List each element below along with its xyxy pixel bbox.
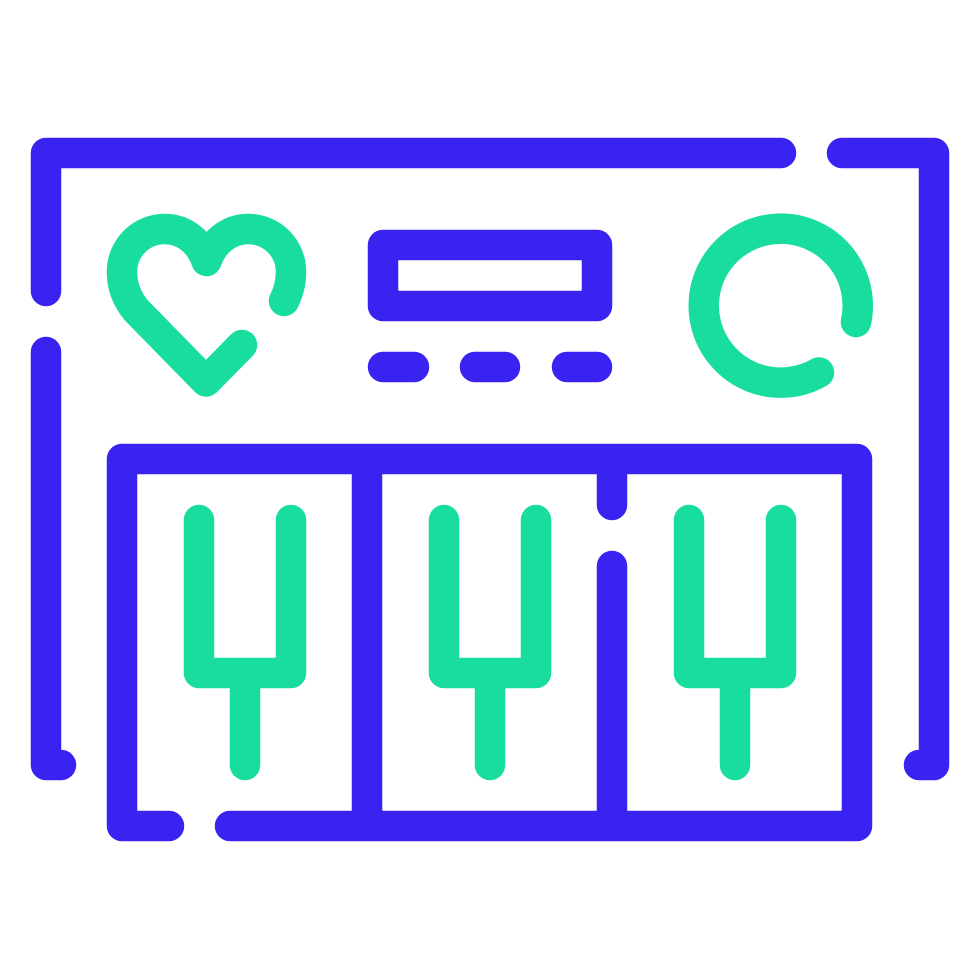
keyboard frame: [122, 459, 857, 826]
outer casing outline: [46, 153, 934, 765]
three small buttons: [383, 352, 597, 382]
slider 3: [689, 520, 781, 765]
slider 2: [444, 520, 536, 765]
icon: round dial: [704, 229, 858, 383]
display screen: [383, 245, 597, 306]
slider 1: [199, 520, 291, 765]
icon: heart: [122, 229, 291, 382]
